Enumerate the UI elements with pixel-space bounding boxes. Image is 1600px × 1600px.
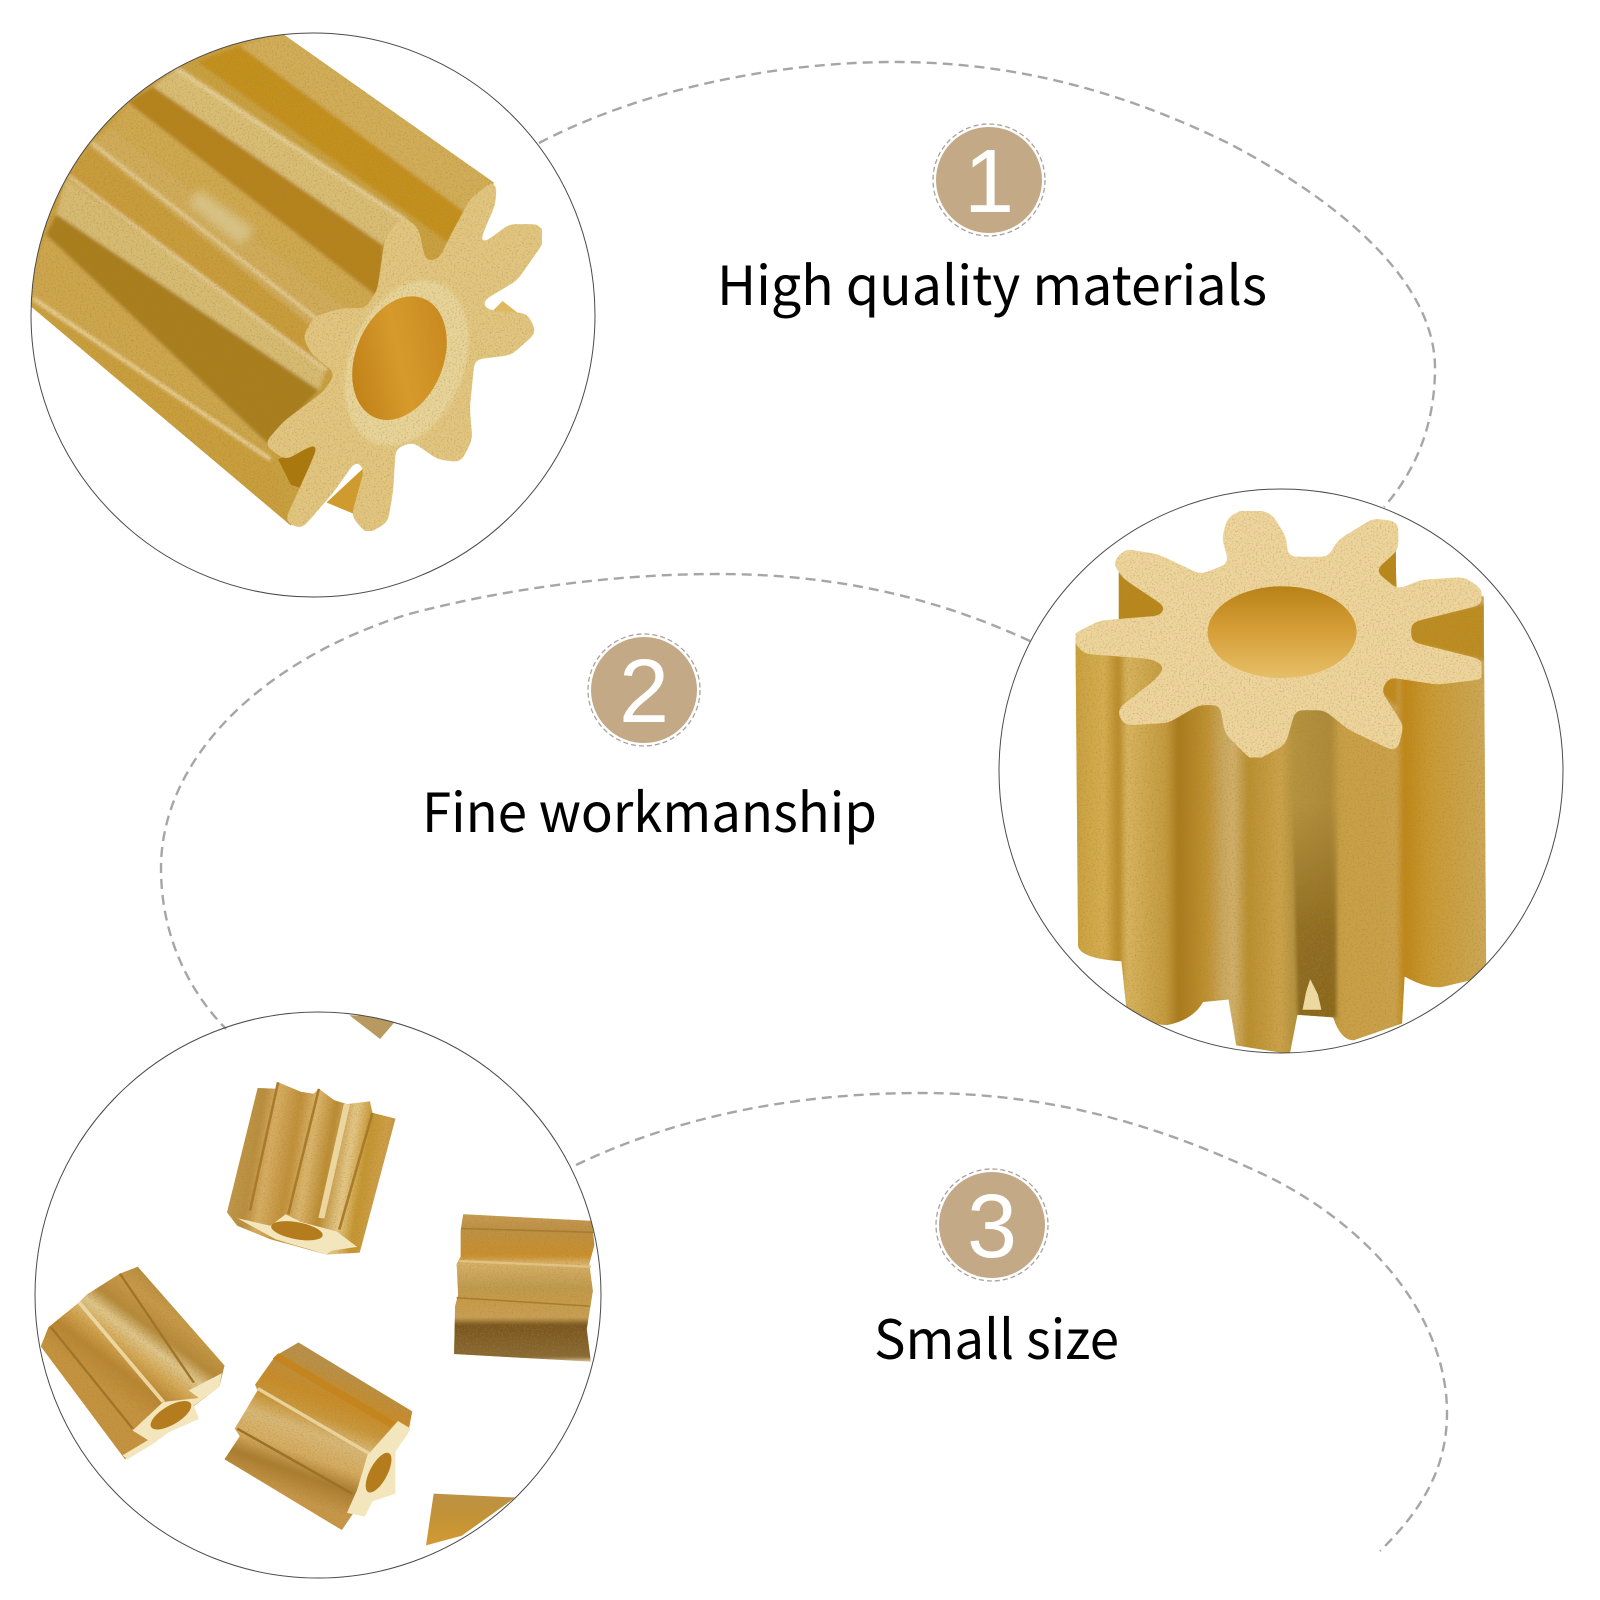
circle outline (31, 33, 595, 597)
gear B (41, 1267, 224, 1459)
circle outline (35, 1012, 601, 1578)
gear face (1076, 511, 1481, 757)
badge 1: 1 (964, 132, 1014, 232)
gear D (454, 1214, 594, 1362)
badge 1 (933, 124, 1045, 236)
badge 3 (936, 1169, 1048, 1281)
badge 3: 3 (967, 1177, 1017, 1277)
dashed connector: bottom (576, 1093, 1447, 1551)
badge 2: 2 (619, 642, 669, 742)
gear bore (1208, 586, 1357, 678)
heading: high quality materials: High quality materials (717, 242, 1267, 321)
gear body (1076, 534, 1486, 1054)
circle outline (999, 489, 1563, 1053)
badge 2 (588, 634, 700, 746)
gear bore (352, 296, 447, 420)
heading: fine workmanship: Fine workmanship (422, 769, 877, 848)
gear body (0, 31, 494, 526)
gear E (426, 1494, 515, 1545)
photo circle: group of small gears (35, 1012, 601, 1578)
back teeth (278, 224, 542, 515)
photo circle: angled brass gear close-up (0, 31, 595, 597)
photo circle: upright brass gear (999, 489, 1563, 1054)
gear C (224, 1343, 412, 1530)
dashed connector: middle (161, 574, 1030, 1029)
gear A (227, 1082, 395, 1254)
dashed connector: top (539, 62, 1435, 507)
gear face (268, 184, 542, 531)
heading: small size: Small size (874, 1296, 1119, 1375)
